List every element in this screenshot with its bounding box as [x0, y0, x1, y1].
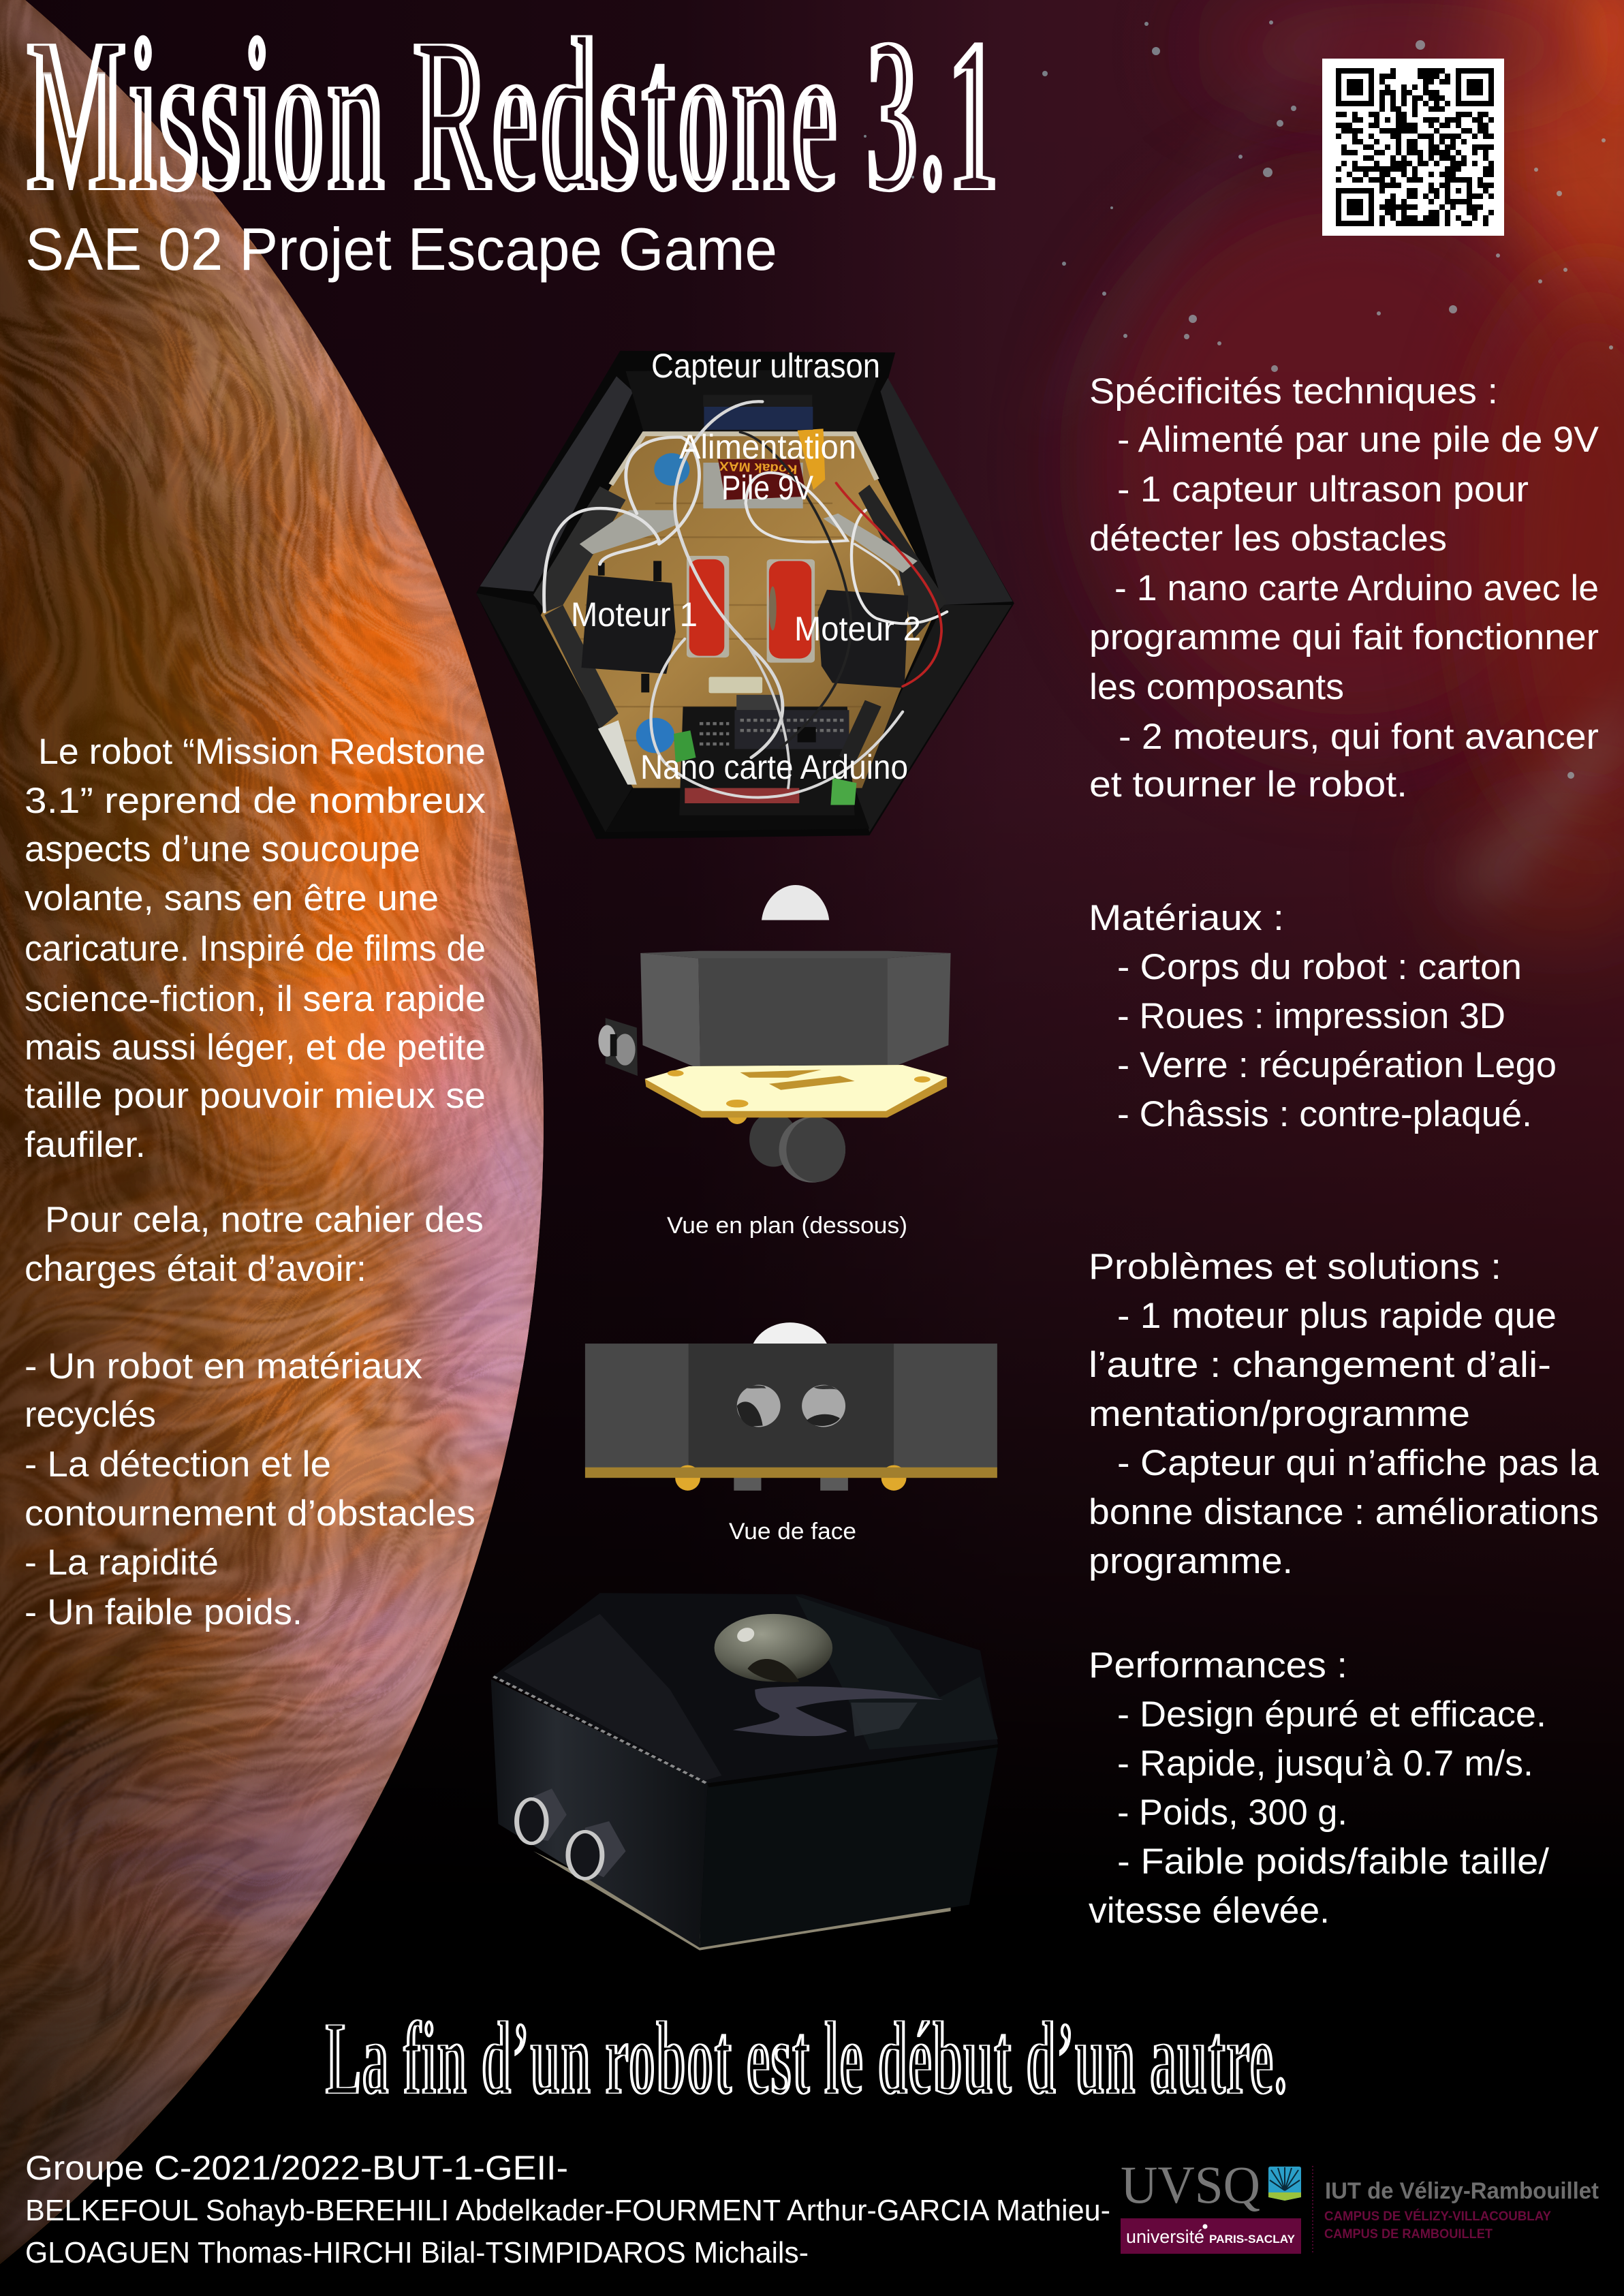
right text: technical specifications: - 1 nano carte Arduino avec le	[1114, 568, 1599, 608]
right text: materials: - Châssis : contre-plaqué.	[1117, 1094, 1532, 1134]
Paris-Saclay badge	[1121, 2218, 1301, 2254]
footer: team credits: Groupe C-2021/2022-BUT-1-GEII-	[25, 2149, 568, 2187]
robot diagram labels: Moteur 1	[571, 595, 698, 634]
right text: technical specifications: - 1 capteur ultrason pour	[1117, 469, 1529, 510]
gold chassis plate	[645, 1065, 947, 1124]
right text: technical specifications: détecter les obstacles	[1089, 518, 1447, 559]
robot diagram labels: Pile 9V	[721, 469, 814, 507]
right text: materials: Matériaux :	[1089, 898, 1284, 938]
caption: view from below: Vue en plan (dessous)	[667, 1213, 907, 1239]
left text: specifications list: - Un robot en matériaux	[25, 1346, 422, 1386]
right text: technical specifications: et tourner le robot.	[1089, 764, 1407, 805]
right text: problems and solutions: Problèmes et solutions :	[1089, 1247, 1501, 1287]
left text: introduction	[25, 732, 486, 1165]
Paris-Saclay badge: université	[1126, 2227, 1204, 2247]
right text: problems and solutions: programme.	[1089, 1541, 1293, 1581]
robot diagram labels: Moteur 2	[794, 610, 921, 648]
right text: technical specifications	[1089, 371, 1599, 805]
right text: materials: - Corps du robot : carton	[1117, 947, 1522, 987]
left text: specifications list: charges était d’avoir:	[25, 1249, 366, 1289]
left text: introduction: science-fiction, il sera rapide	[25, 979, 486, 1019]
3D render: view from below	[598, 885, 951, 1183]
right text: problems and solutions: - Capteur qui n’affiche pas la	[1117, 1443, 1599, 1483]
left text: specifications list: - Un faible poids.	[25, 1592, 302, 1632]
left text: introduction: taille pour pouvoir mieux se	[25, 1076, 486, 1116]
photo: finished robot	[491, 1593, 998, 1951]
footer: team credits	[25, 2149, 1110, 2269]
left text: introduction: aspects d’une soucoupe	[25, 829, 420, 869]
IUT name: IUT de Vélizy-Rambouillet	[1325, 2178, 1599, 2204]
footer: team credits: BELKEFOUL Sohayb-BEREHILI Abdelkader-FOURMENT Arthur-GARCIA Mathieu-	[25, 2194, 1110, 2227]
left text: introduction: 3.1” reprend de nombreux	[25, 781, 486, 821]
right text: problems and solutions: l’autre : changement d’ali-	[1089, 1345, 1551, 1385]
right text: performance: - Faible poids/faible taille/	[1117, 1842, 1549, 1882]
right text: performance: vitesse élevée.	[1089, 1891, 1330, 1931]
UVSQ shield	[1268, 2167, 1301, 2201]
right text: problems and solutions: mentation/programme	[1089, 1394, 1470, 1434]
right text: performance: - Rapide, jusqu’à 0.7 m/s.	[1117, 1743, 1533, 1784]
left text: introduction: mais aussi léger, et de petite	[25, 1027, 486, 1068]
wheels	[749, 1113, 845, 1183]
right text: materials	[1089, 898, 1557, 1134]
left text: introduction: faufiler.	[25, 1125, 146, 1165]
ultrasonic sensor	[598, 1018, 638, 1076]
left text: specifications list: Pour cela, notre cahier des	[45, 1200, 484, 1240]
photo: robot interior top view	[476, 351, 1014, 839]
hex body	[640, 951, 951, 1070]
3D render: front view	[585, 1322, 997, 1491]
right text: performance: - Poids, 300 g.	[1117, 1793, 1347, 1833]
Paris-Saclay badge: PARIS-SACLAY	[1209, 2233, 1296, 2246]
planet: marbled gas giant	[0, 0, 572, 2296]
right text: technical specifications: programme qui fait fonctionner	[1089, 617, 1599, 657]
campus names: CAMPUS DE RAMBOUILLET	[1324, 2227, 1493, 2241]
right text: performance: Performances :	[1089, 1645, 1347, 1686]
left text: introduction: caricature. Inspiré de films de	[25, 929, 486, 969]
right text: problems and solutions	[1089, 1247, 1599, 1581]
caption: front view: Vue de face	[729, 1519, 856, 1545]
robot diagram labels	[571, 347, 921, 786]
right text: performance	[1089, 1645, 1549, 1931]
right text: technical specifications: Spécificités techniques :	[1089, 371, 1498, 412]
logos: UVSQ, Paris-Saclay, IUT	[1114, 2155, 1624, 2262]
left text: specifications list: recyclés	[25, 1395, 156, 1435]
campus names: CAMPUS DE VÉLIZY-VILLACOUBLAY	[1324, 2209, 1551, 2224]
robot diagram labels: Alimentation	[679, 428, 856, 466]
QR code	[1322, 59, 1504, 236]
robot diagram labels: Nano carte Arduino	[640, 748, 908, 786]
left text: introduction: Le robot “Mission Redstone	[38, 732, 486, 772]
photo: robot interior top view: Kodak MAX	[719, 459, 798, 476]
right text: technical specifications: - Alimenté par une pile de 9V	[1117, 420, 1599, 460]
left text: specifications list: - La détection et le	[25, 1444, 331, 1485]
right text: technical specifications: - 2 moteurs, qui font avancer	[1119, 717, 1599, 757]
footer: team credits: GLOAGUEN Thomas-HIRCHI Bilal-TSIMPIDAROS Michails-	[25, 2236, 809, 2269]
right text: problems and solutions: - 1 moteur plus rapide que	[1117, 1296, 1557, 1336]
right text: problems and solutions: bonne distance : améliorations	[1089, 1492, 1599, 1532]
left text: specifications list	[25, 1200, 484, 1632]
left text: specifications list: contournement d’obstacles	[25, 1493, 475, 1534]
dome	[762, 885, 829, 920]
right text: technical specifications: les composants	[1089, 667, 1344, 707]
right text: performance: - Design épuré et efficace.	[1117, 1694, 1546, 1735]
robot diagram labels: Capteur ultrason	[651, 347, 880, 385]
campus names	[1324, 2209, 1551, 2241]
left text: introduction: volante, sans en être une	[25, 878, 439, 918]
left text: specifications list: - La rapidité	[25, 1542, 219, 1583]
right text: materials: - Verre : récupération Lego	[1117, 1045, 1557, 1085]
UVSQ wordmark: UVSQ	[1121, 2155, 1260, 2214]
subtitle: SAE 02 Projet Escape Game	[25, 215, 777, 283]
right text: materials: - Roues : impression 3D	[1117, 996, 1505, 1036]
